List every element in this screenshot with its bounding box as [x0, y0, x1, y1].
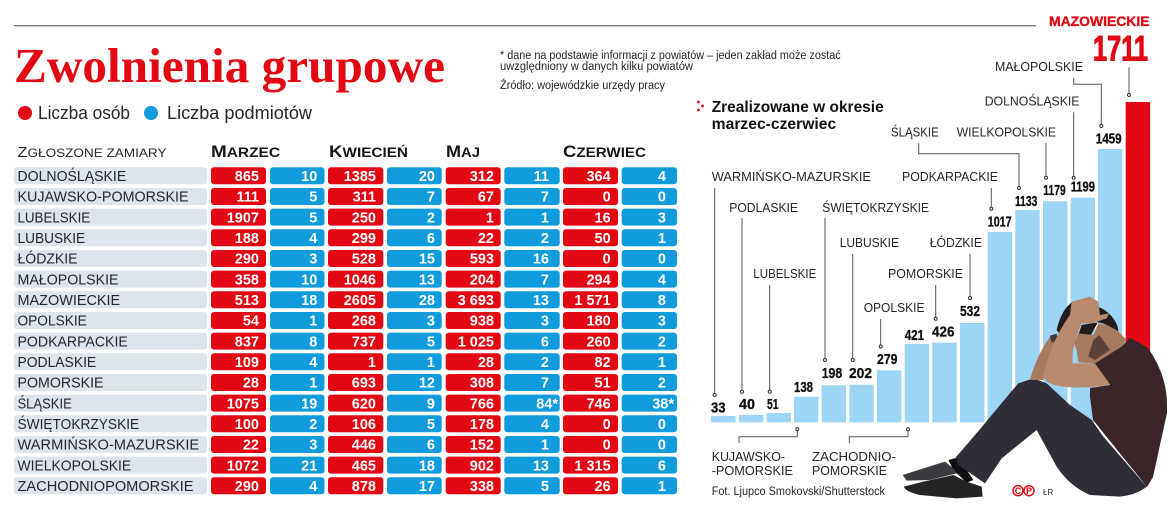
row: Lubelskie: 1 [541, 210, 549, 226]
callout: Mazowieckie 1711: 1711 [1093, 30, 1148, 69]
region labels: PODLASKIE [729, 200, 798, 215]
row: Mazowieckie: 28 [419, 293, 435, 309]
row: Świętokrzyskie: 4 [541, 417, 549, 433]
row: Podkarpackie: 2 [658, 334, 666, 350]
row: Małopolskie: 7 [541, 272, 549, 288]
row: Śląskie [14, 394, 677, 412]
row: Małopolskie: 204 [470, 272, 494, 288]
row: Zachodniopomorskie: 26 [595, 479, 611, 495]
region labels: MAŁOPOLSKIE [995, 59, 1083, 74]
row: Mazowieckie: 1 571 [574, 293, 611, 309]
region labels: WIELKOPOLSKIE [957, 125, 1056, 140]
row: Podlaskie: 4 [309, 355, 317, 371]
bar values [711, 131, 1122, 416]
row: Wielkopolskie: 6 [658, 458, 666, 474]
row: Małopolskie: 358 [235, 272, 259, 288]
row: Zachodniopomorskie: ZACHODNIOPOMORSKIE [18, 479, 194, 495]
footnote and source [500, 50, 841, 92]
row: Podlaskie: 2 [541, 355, 549, 371]
row: Lubelskie: 250 [352, 210, 376, 226]
row: Lubelskie: 5 [309, 210, 317, 226]
photo credit: Fot. Ljupco Smokovski/Shutterstock [712, 486, 885, 498]
footnote and source: * dane na podstawie informacji z powiatów – jeden zakład może zostać [500, 50, 841, 62]
row: Mazowieckie: 13 [533, 293, 549, 309]
row: Zachodniopomorskie: 4 [309, 479, 317, 495]
row: Śląskie: 38* [652, 396, 674, 412]
row: Łódzkie: 3 [309, 252, 317, 268]
row: Podkarpackie: 837 [235, 334, 259, 350]
row: Mazowieckie: 18 [301, 293, 317, 309]
row: Lubuskie: 50 [595, 231, 611, 247]
table column headers [18, 143, 646, 161]
region labels: WARMIŃSKO-MAZURSKIE [712, 169, 871, 184]
row: Lubelskie: 3 [658, 210, 666, 226]
row: Dolnośląskie: 11 [534, 169, 549, 185]
row: Pomorskie: 7 [541, 376, 549, 392]
bar chart [711, 102, 1150, 422]
row: Lubelskie: LUBELSKIE [18, 210, 90, 226]
row: Świętokrzyskie: 0 [658, 417, 666, 433]
table column headers: ZGŁOSZONE ZAMIARY [18, 145, 166, 161]
region labels: ŁÓDZKIE [930, 235, 982, 250]
bar values: 33 [711, 400, 726, 416]
bar values: 198 [822, 366, 842, 382]
row: Lubelskie: 16 [595, 210, 611, 226]
row: Podkarpackie [14, 333, 677, 350]
row: Pomorskie: POMORSKIE [18, 376, 104, 392]
row: Pomorskie: 1 [309, 376, 317, 392]
region labels: LUBUSKIE [840, 235, 899, 250]
region labels: POMORSKIE [812, 463, 887, 478]
bar values: 202 [849, 366, 872, 382]
row: Podkarpackie: 8 [309, 334, 317, 350]
row: Dolnośląskie: 20 [419, 169, 435, 185]
region labels [712, 59, 1083, 478]
row: Kujawsko-pomorskie: 0 [658, 190, 666, 206]
row: Łódzkie: 593 [470, 252, 494, 268]
data table [14, 167, 677, 495]
row: Warmińsko-mazurskie: 152 [470, 438, 494, 454]
table column headers: MARZEC [211, 143, 280, 161]
row: Podlaskie: 28 [478, 355, 494, 371]
row: Małopolskie [14, 271, 677, 288]
table column headers: MAJ [446, 143, 480, 161]
row: Zachodniopomorskie: 1 [658, 479, 666, 495]
row: Opolskie [14, 312, 677, 330]
row: Lubuskie: 188 [235, 231, 259, 247]
legend: Liczba podmiotów [167, 103, 313, 123]
row: Kujawsko-pomorskie: 0 [603, 190, 611, 206]
row: Lubuskie [14, 229, 677, 247]
row: Wielkopolskie: 13 [533, 458, 549, 474]
leader lines [713, 67, 1130, 443]
row: Podlaskie: 1 [658, 355, 666, 371]
row: Kujawsko-pomorskie: 67 [478, 190, 494, 206]
row: Opolskie: 1 [309, 314, 317, 330]
row: Opolskie: OPOLSKIE [18, 314, 87, 330]
row: Warmińsko-mazurskie: 0 [658, 438, 666, 454]
row: Świętokrzyskie: 106 [352, 417, 376, 433]
row: Kujawsko-pomorskie: 7 [427, 190, 435, 206]
bar values: 1133 [1015, 194, 1037, 210]
row: Dolnośląskie: 1385 [344, 169, 376, 185]
chart heading: Zrealizowane w okresie [712, 99, 884, 116]
copyright marks: P [1026, 486, 1032, 496]
row: Podkarpackie: 737 [352, 334, 376, 350]
row: Łódzkie: 0 [603, 252, 611, 268]
chart heading [697, 99, 884, 133]
row: Opolskie: 268 [352, 314, 376, 330]
row: Śląskie: 19 [301, 396, 317, 412]
row: Lubelskie: 1907 [227, 210, 259, 226]
bar values: 532 [960, 304, 980, 320]
row: Świętokrzyskie: 0 [603, 417, 611, 433]
footnote and source: uwzględniony w danych kilku powiatów [500, 61, 694, 73]
row: Dolnośląskie: 865 [235, 169, 259, 185]
row: Lubelskie: 2 [427, 210, 435, 226]
row: Wielkopolskie [14, 457, 677, 474]
row: Warmińsko-mazurskie: 6 [427, 438, 435, 454]
row: Pomorskie: 12 [419, 376, 435, 392]
row: Wielkopolskie: WIELKOPOLSKIE [18, 458, 132, 474]
copyright marks: ŁR [1043, 488, 1053, 497]
row: Śląskie: 84* [536, 396, 558, 412]
row: Warmińsko-mazurskie: 1 [541, 438, 549, 454]
bar values: 421 [905, 328, 924, 344]
row: Pomorskie: 51 [595, 376, 611, 392]
callout: Mazowieckie 1711 [1049, 14, 1150, 69]
row: Zachodniopomorskie: 338 [470, 479, 494, 495]
row: Mazowieckie: MAZOWIECKIE [18, 293, 121, 309]
row: Warmińsko-mazurskie: 22 [243, 438, 259, 454]
row: Łódzkie: 15 [419, 252, 435, 268]
row: Łódzkie: 290 [235, 252, 259, 268]
row: Małopolskie: 1046 [344, 272, 376, 288]
row: Pomorskie [14, 374, 677, 392]
row: Opolskie: 54 [243, 314, 259, 330]
row: Podlaskie: 82 [595, 355, 611, 371]
row: Lubuskie: LUBUSKIE [18, 231, 85, 247]
chart heading: marzec-czerwiec [712, 116, 837, 133]
row: Pomorskie: 693 [352, 376, 376, 392]
row: Śląskie: 746 [586, 396, 611, 412]
row: Lubelskie [14, 209, 677, 226]
row: Podlaskie: PODLASKIE [18, 355, 97, 371]
region labels: POMORSKIE [888, 266, 963, 281]
table column headers: KWIECIEŃ [329, 143, 408, 161]
row: Małopolskie: 13 [419, 272, 435, 288]
row: Podlaskie: 1 [427, 355, 435, 371]
row: Lubuskie: 2 [541, 231, 549, 247]
row: Opolskie: 938 [470, 314, 494, 330]
row: Opolskie: 3 [427, 314, 435, 330]
row: Lubelskie: 1 [486, 210, 494, 226]
bar values: 1017 [988, 215, 1012, 231]
row: Podkarpackie: 6 [541, 334, 549, 350]
row: Śląskie: 1075 [227, 396, 259, 412]
row: Mazowieckie: 3 693 [458, 293, 494, 309]
bar values: 426 [932, 325, 954, 341]
copyright marks [1013, 486, 1053, 497]
row: Lubuskie: 6 [427, 231, 435, 247]
row: Łódzkie: 0 [658, 252, 666, 268]
region labels: ŚWIĘTOKRZYSKIE [822, 200, 929, 215]
row: Lubuskie: 1 [658, 231, 666, 247]
row: Mazowieckie [14, 291, 677, 309]
row: Lubuskie: 22 [478, 231, 494, 247]
copyright marks: C [1015, 486, 1022, 496]
row: Małopolskie: 294 [586, 272, 611, 288]
row: Świętokrzyskie [14, 415, 677, 433]
row: Kujawsko-pomorskie: 311 [353, 190, 376, 206]
row: Wielkopolskie: 1072 [227, 458, 259, 474]
row: Opolskie: 180 [586, 314, 611, 330]
row: Podlaskie: 1 [368, 355, 376, 371]
region labels: ZACHODNIO- [812, 449, 896, 464]
row: Warmińsko-mazurskie: 0 [603, 438, 611, 454]
row: Małopolskie: 4 [658, 272, 666, 288]
region labels: DOLNOŚLĄSKIE [985, 94, 1080, 108]
row: Kujawsko-pomorskie [14, 188, 677, 206]
row: Śląskie: 620 [352, 396, 376, 412]
table column headers: CZERWIEC [563, 143, 646, 161]
region labels: PODKARPACKIE [902, 169, 998, 184]
row: Śląskie: 766 [470, 396, 494, 412]
row: Świętokrzyskie: 2 [309, 417, 317, 433]
row: Wielkopolskie: 18 [419, 458, 435, 474]
row: Mazowieckie: 8 [658, 293, 666, 309]
bar values: 279 [877, 352, 898, 368]
bar values: 51 [767, 397, 778, 413]
row: Podkarpackie: PODKARPACKIE [18, 334, 128, 350]
region labels: OPOLSKIE [864, 300, 925, 315]
row: Śląskie: ŚLĄSKIE [18, 394, 72, 412]
region labels: -POMORSKIE [712, 463, 793, 478]
region labels: KUJAWSKO- [712, 449, 785, 464]
row: Dolnośląskie: 364 [586, 169, 611, 185]
region labels: LUBELSKIE [753, 266, 816, 281]
bar values: 40 [739, 397, 755, 413]
row: Pomorskie: 308 [470, 376, 494, 392]
row: Łódzkie: ŁÓDZKIE [18, 251, 78, 268]
bar values: 1199 [1071, 180, 1095, 196]
row: Kujawsko-pomorskie: KUJAWSKO-POMORSKIE [18, 190, 189, 206]
row: Zachodniopomorskie [14, 477, 677, 495]
row: Kujawsko-pomorskie: 111 [236, 190, 259, 206]
bar values: 138 [794, 380, 813, 396]
row: Świętokrzyskie: 178 [470, 417, 494, 433]
legend: Liczba osób [38, 103, 130, 123]
row: Wielkopolskie: 21 [301, 458, 317, 474]
row: Świętokrzyskie: ŚWIĘTOKRZYSKIE [18, 415, 140, 433]
row: Zachodniopomorskie: 290 [235, 479, 259, 495]
row: Łódzkie: 528 [352, 252, 376, 268]
row: Opolskie: 3 [658, 314, 666, 330]
row: Warmińsko-mazurskie: WARMIŃSKO-MAZURSKIE [18, 437, 200, 454]
row: Dolnośląskie: DOLNOŚLĄSKIE [18, 167, 127, 185]
row: Lubuskie: 4 [309, 231, 317, 247]
row: Podkarpackie: 5 [427, 334, 435, 350]
row: Dolnośląskie: 10 [301, 169, 317, 185]
bar values: 1459 [1096, 131, 1122, 147]
callout: Mazowieckie 1711: MAZOWIECKIE [1049, 14, 1150, 29]
row: Warmińsko-mazurskie: 3 [309, 438, 317, 454]
row: Podlaskie [14, 353, 677, 371]
row: Wielkopolskie: 902 [470, 458, 494, 474]
row: Śląskie: 9 [427, 396, 435, 412]
bar values: 1179 [1043, 183, 1066, 199]
row: Łódzkie: 16 [533, 252, 549, 268]
row: Mazowieckie: 2605 [344, 293, 376, 309]
row: Pomorskie: 2 [658, 376, 666, 392]
row: Wielkopolskie: 1 315 [574, 458, 611, 474]
row: Zachodniopomorskie: 17 [419, 479, 435, 495]
legend [18, 103, 313, 123]
row: Zachodniopomorskie: 5 [541, 479, 549, 495]
row: Małopolskie: MAŁOPOLSKIE [18, 272, 119, 288]
row: Podkarpackie: 260 [586, 334, 611, 350]
row: Świętokrzyskie: 5 [427, 417, 435, 433]
footnote and source: Źródło: wojewódzkie urzędy pracy [500, 79, 665, 92]
region labels: ŚLĄSKIE [891, 125, 939, 140]
row: Podkarpackie: 1 025 [458, 334, 494, 350]
row: Warmińsko-mazurskie: 446 [352, 438, 376, 454]
row: Dolnośląskie: 312 [470, 169, 494, 185]
title: Zwolnienia grupowe [14, 38, 445, 93]
row: Kujawsko-pomorskie: 5 [309, 190, 317, 206]
row: Dolnośląskie: 4 [658, 169, 666, 185]
row: Opolskie: 3 [541, 314, 549, 330]
row: Podlaskie: 109 [235, 355, 259, 371]
row: Małopolskie: 10 [301, 272, 317, 288]
row: Łódzkie [14, 250, 677, 268]
row: Kujawsko-pomorskie: 7 [541, 190, 549, 206]
row: Dolnośląskie [14, 167, 677, 185]
row: Wielkopolskie: 465 [352, 458, 376, 474]
row: Lubuskie: 299 [352, 231, 376, 247]
row: Zachodniopomorskie: 878 [352, 479, 376, 495]
row: Mazowieckie: 513 [235, 293, 259, 309]
photo: seated man with head in hands [903, 297, 1167, 498]
row: Świętokrzyskie: 100 [235, 417, 259, 433]
row: Warmińsko-mazurskie [14, 436, 677, 454]
row: Pomorskie: 28 [243, 376, 259, 392]
